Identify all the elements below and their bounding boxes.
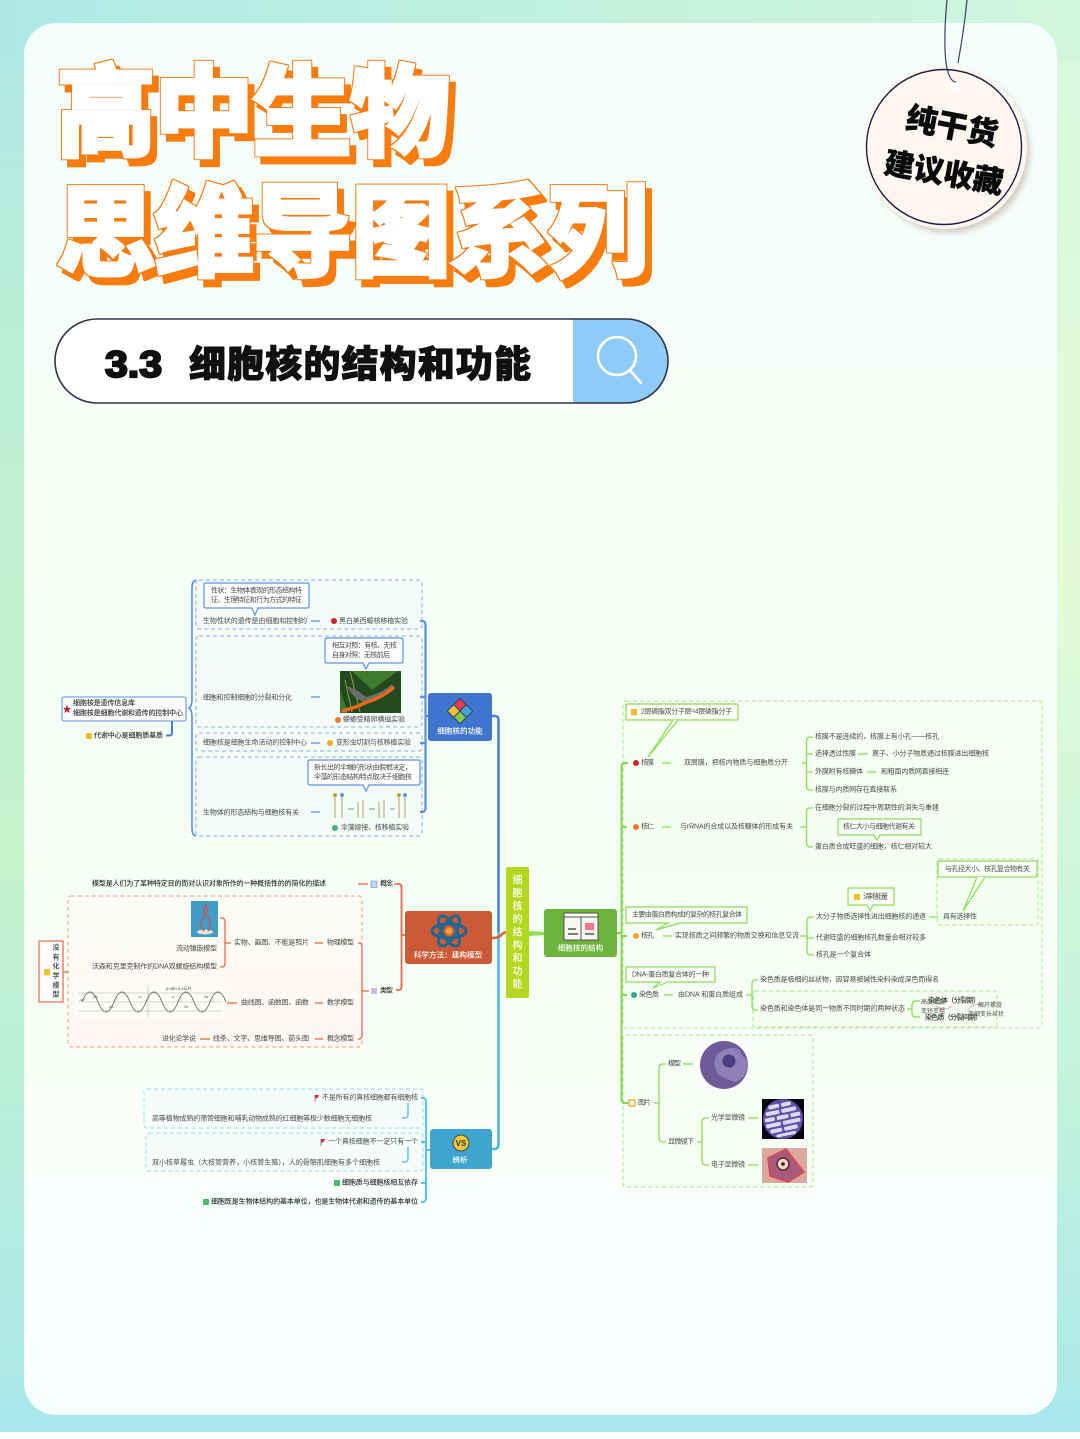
item: pictures: 模型 (668, 1058, 681, 1068)
central topic: 能 (512, 978, 522, 990)
item: pictures (629, 1040, 807, 1183)
item: chromatin (626, 967, 1004, 1022)
badge text: 纯干货 (903, 101, 1001, 153)
item: chromatin: 染色质 (639, 990, 659, 998)
icon: atom (432, 913, 466, 949)
item: nuclear membrane: 核膜不是连续的，核膜上有小孔——核孔 (815, 732, 939, 740)
brackets (189, 580, 428, 836)
item: nucleolus: 在细胞分裂的过程中周期性的消失与重建 (815, 802, 939, 812)
item: basic unit: 细胞既是生物体结构的基本单位，也是生物体代谢和遗传的基本单位 (211, 1196, 418, 1206)
search bar heading (55, 319, 668, 403)
central topic: 的 (512, 912, 522, 926)
callout: nucleus summary: 代谢中心是细胞质基质 (94, 730, 163, 740)
item: nuclear pore: 核孔 (641, 930, 654, 940)
icon: VS: VS (456, 1139, 467, 1148)
badge string (945, 0, 967, 82)
node: modelling (405, 911, 492, 964)
chart: sine curve: -2π (108, 1005, 114, 1009)
central topic: 构 (512, 938, 522, 952)
item: chromatin: DNA-蛋白质复合体的一种 (632, 970, 709, 978)
callout: no chemical model: 型 (52, 990, 60, 998)
central topic: 和 (512, 952, 522, 964)
hanging badge (863, 0, 1030, 233)
item: nuclear membrane: 和粗面内质网直接相连 (881, 766, 949, 776)
item: nuclear membrane: 核膜与内质网存在直接联系 (815, 784, 897, 794)
item: physical model: 沃森和克里克制作的DNA双螺旋结构模型 (92, 962, 217, 970)
callout: no chemical model: 模 (52, 980, 60, 990)
section number: 3.3 (105, 344, 162, 385)
item: morphology: 新长出的伞帽的形状由假根决定， (314, 762, 412, 772)
item: nuclear membrane: 选择透过性膜 (815, 748, 856, 758)
badge shadow (868, 71, 1030, 233)
central topic: 细 (512, 874, 522, 886)
dashed group box (68, 896, 362, 1047)
item: nuclear pore: 具有选择性 (943, 912, 977, 920)
item: math model: 数学模型 (327, 998, 354, 1006)
brackets (220, 884, 405, 1039)
badge hole (950, 82, 960, 92)
chart: sine curve: -π (138, 995, 142, 999)
chart: sine curve (75, 982, 226, 1018)
item: math model: 曲线图、函数图、函数 (241, 998, 309, 1006)
item: morphology: 伞藻的形态结构特点取决于细胞核 (314, 772, 412, 781)
callout: nucleus summary: 细胞核是细胞代谢和遗传的控制中心 (73, 708, 183, 717)
node: function: 细胞核的功能 (437, 726, 483, 736)
item: nuclear membrane: 外膜附有核糖体 (815, 766, 863, 776)
item: chromatin: 变细变长丝状 (968, 1010, 1004, 1018)
chart: sine curve: 2π (184, 1005, 189, 1009)
item: pictures: 光学显微镜 (711, 1112, 745, 1122)
mind map (39, 580, 1042, 1206)
item: life activity control (203, 738, 411, 746)
item: not all have nucleus (152, 1092, 418, 1122)
item: concept (92, 878, 398, 888)
central topic: 结 (512, 926, 522, 938)
item: morphology (203, 760, 420, 832)
central topic: 功 (512, 966, 522, 978)
node: analysis: 辨析 (452, 1154, 468, 1164)
trunk connector (617, 763, 628, 1103)
section title: 细胞核的结构和功能 (189, 344, 531, 385)
callout: nucleus summary (62, 697, 186, 740)
photo: newt (340, 671, 401, 713)
callout: no chemical model: 化 (52, 962, 60, 970)
title: 思维导图系列 (56, 178, 648, 290)
item: chromatin: 染色质是极细的丝状物，因容易被碱性染料染成深色而得名 (760, 974, 939, 984)
chart: sine curve: π (172, 995, 175, 999)
central topic: 核 (512, 900, 522, 912)
node: analysis (430, 1129, 492, 1169)
item: morphology: 伞藻嫁接、核移植实验 (341, 822, 409, 832)
item: heredity control: 性状：生物体表现的形态结构特 (211, 586, 302, 594)
icon: magnifier (598, 337, 641, 383)
dashed group boxes (196, 580, 422, 836)
dashed group boxes (623, 701, 1042, 1187)
chart: sine curve: y=sin x,x∈R (166, 986, 192, 991)
item: physical model: 流动镶嵌模型 (176, 944, 217, 952)
item: types (371, 986, 393, 994)
item: division control (203, 638, 405, 724)
item: division control: 蝾螈受精卵横缢实验 (343, 714, 405, 724)
item: chromatin: 高度螺旋 (921, 998, 945, 1006)
callout: no chemical model: 有 (52, 952, 60, 962)
item: types: 类型 (380, 986, 393, 994)
node: modelling: 科学方法：建构模型 (414, 950, 483, 960)
item: conceptual model: 进化论学说 (162, 1034, 196, 1042)
item: nuclear pore: 与孔径大小、核孔复合物有关 (945, 864, 1030, 873)
dashed group boxes (144, 1089, 423, 1171)
panel: nucleus function (62, 580, 492, 836)
item: division control: 自身对照：无核前后 (332, 650, 390, 659)
item: physical model: 物理模型 (327, 938, 354, 946)
item: nuclear pore: 代谢旺盛的细胞核孔数量会相对较多 (816, 932, 926, 942)
item: nucleolus: 与rRNA的合成以及核糖体的形成有关 (680, 822, 793, 830)
item: life activity control: 变形虫切割与核移植实验 (336, 738, 411, 746)
title: 高中生物 (56, 58, 450, 170)
central topic: 胞 (512, 886, 522, 900)
item: division control: 相互对照：有核、无核 (332, 640, 397, 650)
badge disc (863, 65, 1027, 229)
item: math model (75, 982, 354, 1018)
item: concept: 概念 (380, 878, 393, 888)
item: multiple nuclei: 一个真核细胞不一定只有一个 (328, 1136, 418, 1146)
item: conceptual model: 线条、文字、思维导图、箭头图 (213, 1034, 309, 1042)
callout: no chemical model: 学 (52, 971, 60, 980)
node: structure: 细胞核的结构 (558, 942, 604, 952)
central topic (506, 867, 529, 998)
node: function (428, 693, 492, 741)
item: nuclear membrane: 离子、小分子物质通过核膜进出细胞核 (872, 748, 989, 758)
callout: no chemical model: 没 (52, 942, 60, 952)
item: pictures: 显微镜下 (668, 1136, 694, 1146)
icon: layout (564, 913, 598, 940)
item: concept: 模型是人们为了某种特定目的而对认识对象所作的一种概括性的的简化的描述 (92, 878, 326, 888)
item: morphology: 生物体的形态结构与细胞核有关 (203, 808, 299, 816)
item: not all have nucleus: 不是所有的真核细胞都有细胞核 (322, 1092, 418, 1102)
item: conceptual model: 概念模型 (327, 1034, 354, 1042)
item: pictures: 电子显微镜 (711, 1160, 745, 1168)
chart: sine curve: -4π (79, 998, 85, 1002)
item: heredity control (203, 583, 408, 625)
image: acetabularia grafting (333, 793, 407, 818)
bracket (421, 1098, 430, 1202)
title (56, 58, 648, 290)
item: nuclear pore: 消耗能量 (863, 892, 888, 900)
item: division control: 细胞和控制细胞的分裂和分化 (203, 692, 292, 702)
chart: sine curve: 3π (204, 995, 209, 999)
item: chromatin: 染色体（分裂期） (928, 996, 980, 1004)
item: nuclear pore: 大分子物质选择性进出细胞核的通道 (816, 912, 926, 920)
callout: no chemical model (39, 941, 68, 1002)
item: chromatin: 染色质和染色体是同一物质不同时期的两种状态 (760, 1004, 905, 1012)
item: heredity control: 黑白美西螈核移植实验 (339, 616, 408, 625)
node: structure (544, 909, 617, 957)
callout: nucleus summary: 细胞核是遗传信息库 (73, 698, 135, 707)
item: chromatin: 变短变粗 (921, 1007, 945, 1015)
item: nuclear pore: 实现核质之间频繁的物质交换和信息交流 (675, 930, 799, 940)
image: DNA model (191, 901, 218, 937)
item: heredity control: 征、生理特征和行为方式的特征 (211, 595, 302, 604)
item: nuclear pore (626, 861, 1037, 958)
item: multiple nuclei (152, 1136, 418, 1166)
hanging badge: 建议收藏 (882, 147, 1006, 200)
item: not all have nucleus: 高等植物成熟的筛管细胞和哺乳动物成熟的红细胞等极少数细胞无细胞核 (152, 1114, 372, 1122)
item: nuclear pore: 主要由蛋白质构成的复杂的核孔复合体 (632, 910, 742, 918)
item: life activity control: 细胞核是细胞生命活动的控制中心 (203, 738, 307, 746)
item: nucleolus: 核仁 (641, 822, 654, 830)
item: nucleolus: 核仁大小与细胞代谢有关 (843, 822, 915, 830)
panel: nucleus structure (544, 701, 1042, 1187)
item: multiple nuclei: 双小核草履虫（大核管营养，小核管生殖），人的骨骼肌细胞有多个细胞核 (152, 1158, 380, 1166)
item: nucleolus: 蛋白质合成旺盛的细胞，核仁相对较大 (815, 842, 932, 850)
item: physical model (92, 901, 354, 970)
icon: puzzle (447, 698, 473, 724)
image: electron micrograph (762, 1148, 807, 1183)
item: interdependence: 细胞质与细胞核相互依存 (342, 1178, 418, 1186)
main connectors (492, 716, 544, 1149)
image: light micrograph (762, 1099, 804, 1139)
item: conceptual model (162, 1034, 354, 1042)
item: chromatin: 解开螺旋 (978, 1001, 1002, 1009)
item: nuclear membrane (626, 704, 989, 794)
item: nuclear membrane: 双层膜，把核内物质与细胞质分开 (684, 758, 788, 766)
item: nuclear membrane: 2层磷脂双分子层=4层磷脂分子 (641, 706, 732, 716)
chart: sine curve: -3π (92, 995, 98, 999)
item: nuclear membrane: 核膜 (641, 758, 654, 766)
item: chromatin: 由DNA 和蛋白质组成 (678, 990, 743, 998)
panel: analysis (144, 1089, 492, 1206)
panel: modelling (39, 878, 492, 1047)
item: heredity control: 生物性状的遗传是由细胞和控制的 (203, 616, 307, 625)
item: nuclear pore: 核孔是一个复合体 (816, 950, 871, 958)
image: cell model (696, 1040, 752, 1090)
item: chromatin: 染色质（分裂间期） (925, 1012, 982, 1022)
item: nucleolus (633, 802, 939, 850)
item: pictures: 图片 (638, 1098, 651, 1106)
item: physical model: 实物、画图、不能是照片 (234, 938, 309, 946)
